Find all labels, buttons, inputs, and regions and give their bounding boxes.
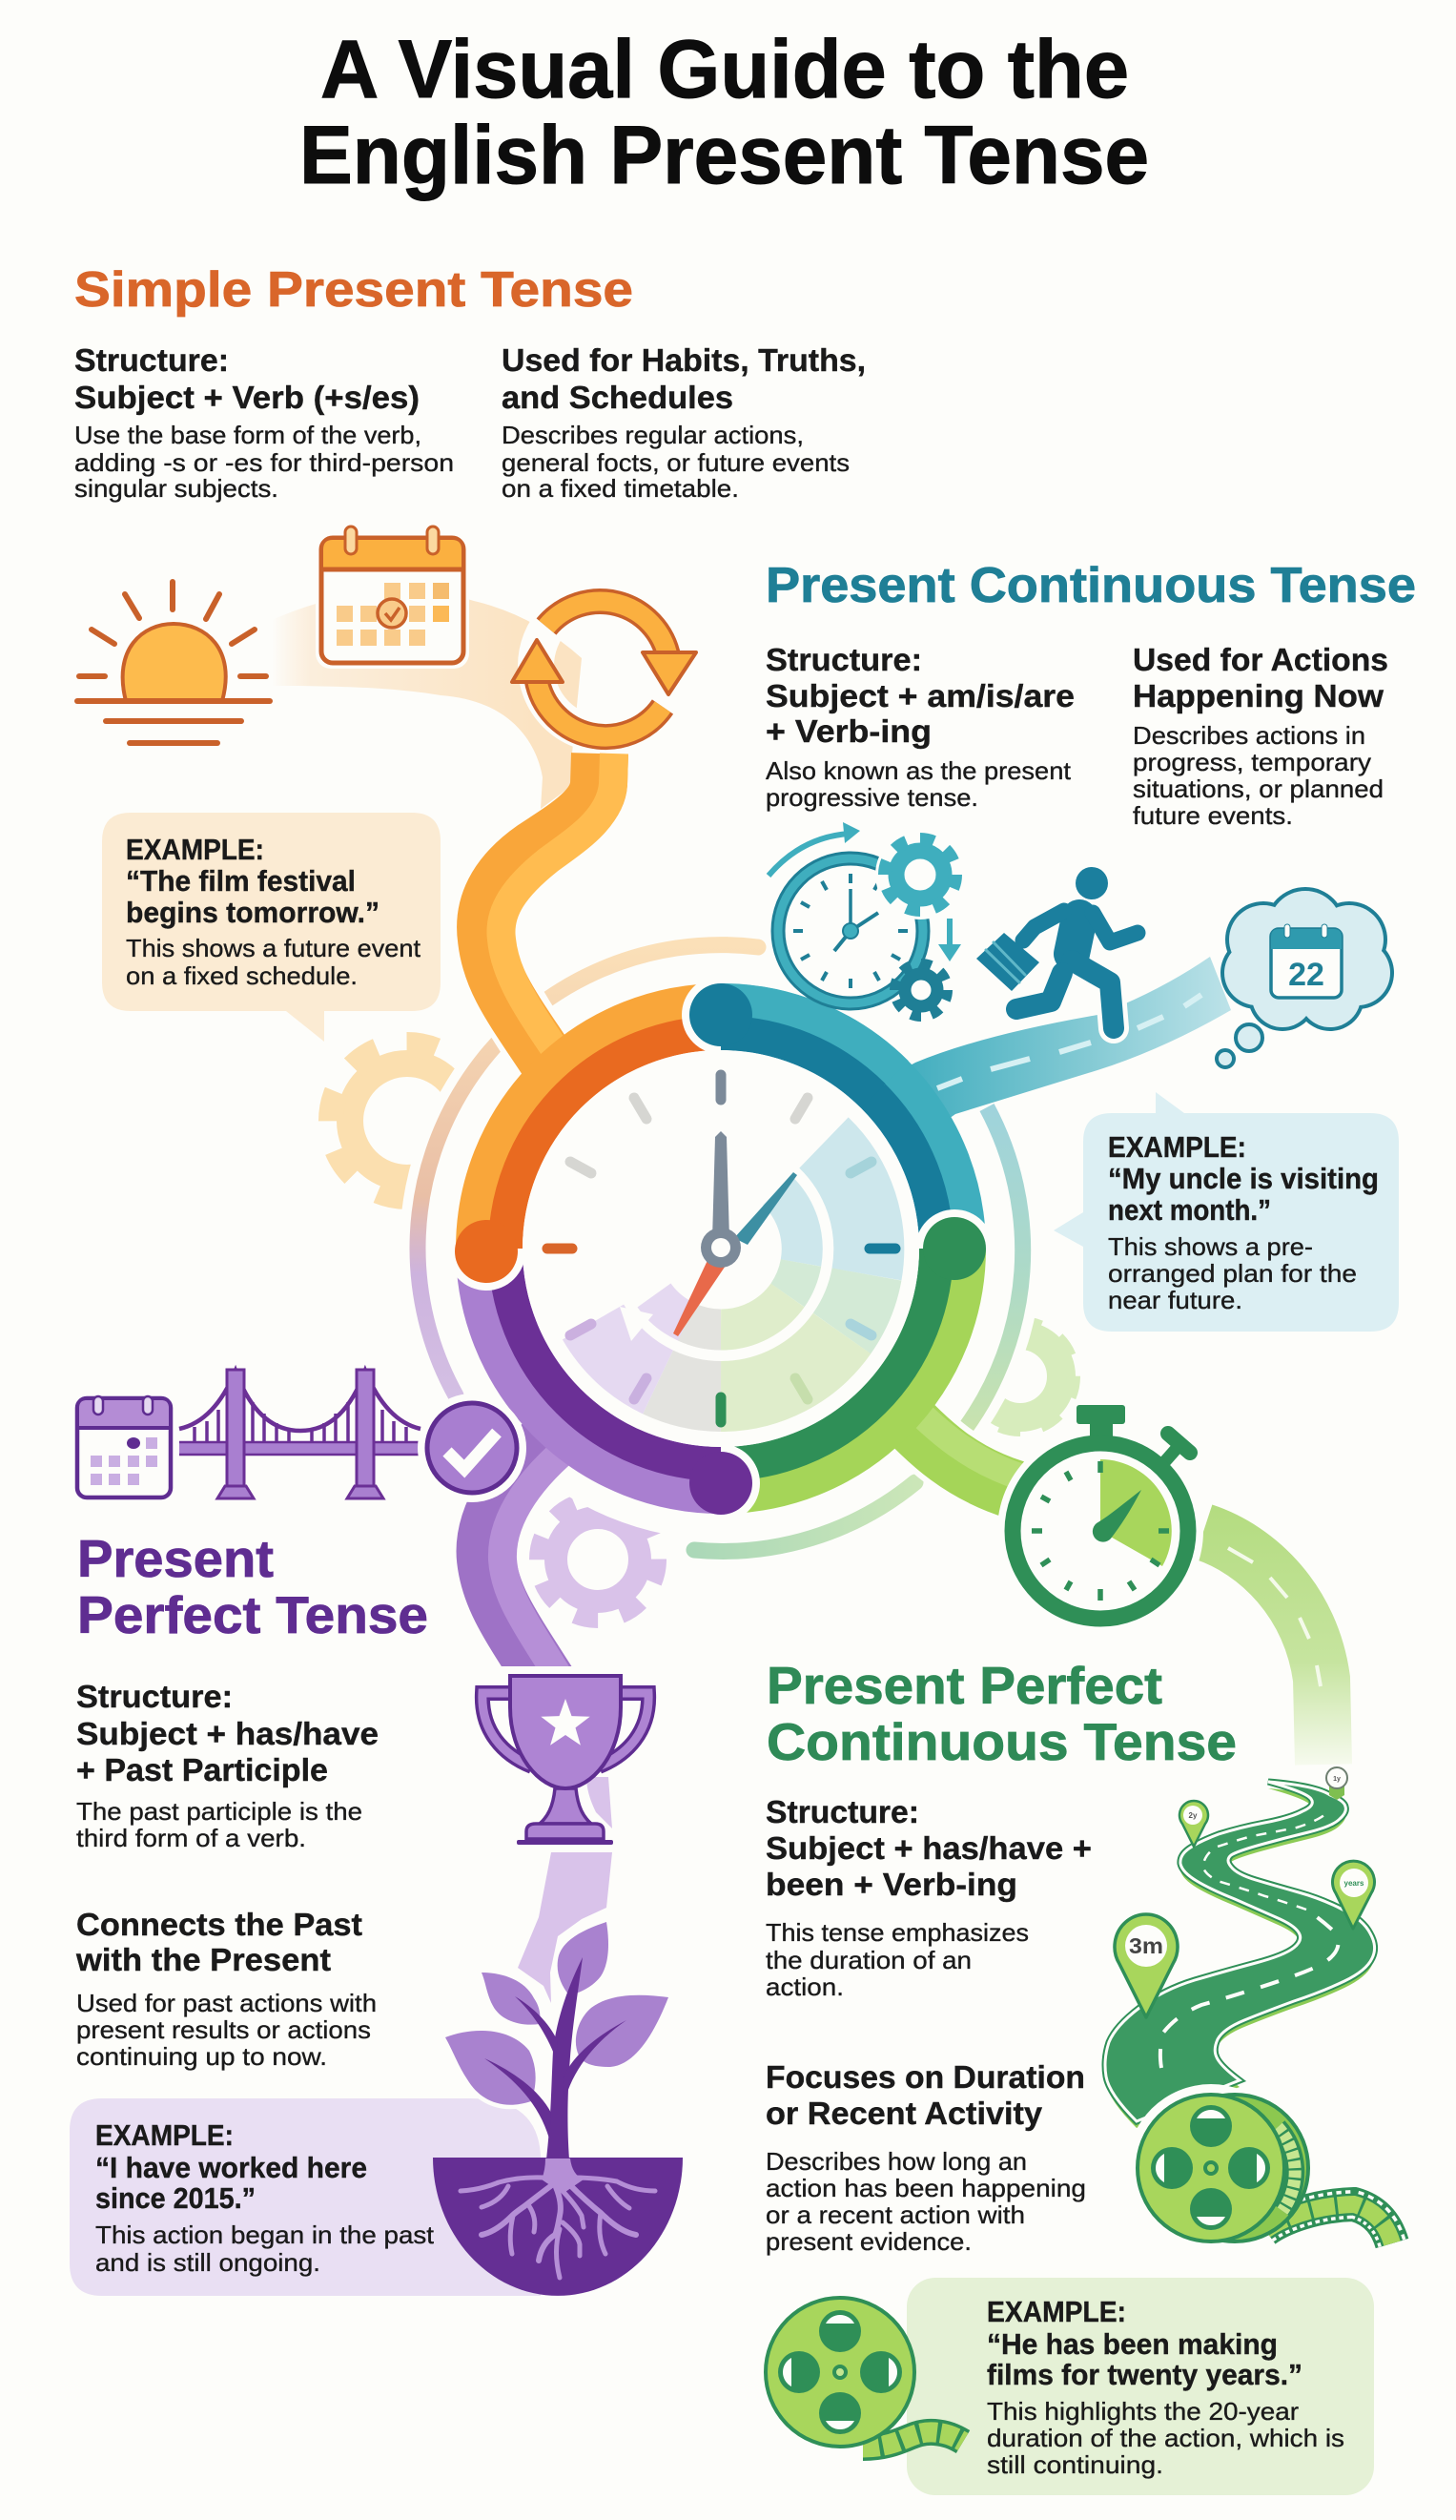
background gear: orange — [331, 1044, 483, 1197]
icon: film reel small — [766, 2298, 963, 2448]
clock ring: green segment — [721, 1209, 994, 1497]
green road — [1203, 1532, 1323, 1765]
usage block: Used for Actions — [1133, 642, 1388, 677]
usage block: Happening Now — [1133, 678, 1384, 713]
pin: far: 1y — [1333, 1776, 1341, 1783]
usage block: action has been happening — [766, 2174, 1086, 2202]
icon: check badge — [418, 1394, 526, 1502]
structure block: been + Verb-ing — [766, 1867, 1017, 1902]
structure block: third form of a verb. — [76, 1824, 306, 1852]
structure block — [766, 1794, 1092, 2001]
clock halo — [400, 927, 1042, 1570]
clock ring: orange segment — [447, 1001, 721, 1291]
icon: map pins — [1115, 1767, 1375, 2017]
callout: green example: This highlights the 20-year — [987, 2397, 1299, 2426]
gear: large teal — [875, 830, 965, 919]
pin: far — [1326, 1767, 1347, 1800]
icon: circular arrows — [512, 597, 696, 737]
callout: green example: still continuing. — [987, 2450, 1163, 2479]
usage block: with the Present — [75, 1942, 331, 1977]
icon: thought cloud with calendar — [1217, 887, 1394, 1067]
clock arrow — [620, 1307, 653, 1341]
usage block — [766, 2059, 1086, 2256]
gear: small teal — [894, 963, 948, 1017]
panel: present continuous text — [766, 558, 1416, 830]
structure block: The past participle is the — [76, 1797, 362, 1826]
icon: sun — [77, 582, 270, 743]
pin: 2y — [1179, 1801, 1208, 1847]
structure block: action. — [766, 1973, 844, 2001]
callout: teal example: EXAMPLE: — [1108, 1130, 1246, 1164]
callout: green example: films for twenty years.” — [987, 2358, 1302, 2391]
structure block: the duration of an — [766, 1946, 972, 1974]
heading: present perfect: Perfect Tense — [77, 1585, 428, 1644]
usage block: Describes actions in — [1133, 721, 1365, 750]
star — [541, 1699, 590, 1745]
callout: purple example: “I have worked here — [95, 2151, 367, 2184]
usage block: Describes regular actions, — [502, 421, 804, 449]
teal road — [901, 957, 1231, 1126]
callout: purple example: EXAMPLE: — [95, 2118, 234, 2152]
title — [299, 24, 1149, 201]
clock face — [523, 1050, 919, 1447]
heading: present perfect continuous: Continuous Tense — [767, 1712, 1237, 1771]
callout: orange example: “The film festival — [126, 864, 356, 898]
structure block: Structure: — [766, 642, 922, 677]
callout: teal example: This shows a pre- — [1108, 1232, 1313, 1261]
structure block: Also known as the present — [766, 756, 1072, 785]
stem — [484, 1957, 626, 2159]
pale orange path — [272, 590, 582, 809]
icon: plant with roots — [433, 1922, 683, 2296]
callout: teal example: orranged plan for the — [1108, 1259, 1357, 1288]
orange road — [485, 754, 614, 1066]
callout: teal example — [1054, 1092, 1399, 1332]
background gear: green — [967, 1323, 1074, 1430]
callout: teal example: near future. — [1108, 1286, 1242, 1314]
clock ticks — [547, 1075, 895, 1422]
usage block: situations, or planned — [1133, 775, 1384, 803]
pale purple path — [518, 1852, 612, 2003]
usage block: Focuses on Duration — [766, 2059, 1085, 2095]
callout: teal example: “My uncle is visiting — [1108, 1162, 1379, 1195]
structure block — [76, 1679, 379, 1852]
icon: film reel large — [1127, 2084, 1392, 2252]
panel: present perfect text — [75, 1529, 428, 2071]
pin: 2y: 2y — [1189, 1811, 1198, 1820]
structure block: Subject + has/have + — [766, 1830, 1092, 1866]
icon: clock with gears — [769, 822, 965, 1017]
structure block: Subject + Verb (+s/es) — [74, 380, 420, 415]
usage block: or Recent Activity — [766, 2096, 1043, 2131]
roots — [461, 2159, 655, 2278]
structure block — [74, 342, 454, 503]
background gear: purple — [539, 1500, 657, 1619]
callout: orange example: begins tomorrow.” — [126, 896, 379, 929]
callout: green example: “He has been making — [987, 2327, 1278, 2361]
pin: 3m — [1115, 1914, 1178, 2017]
structure block: adding -s or -es for third-person — [74, 448, 454, 477]
structure block: Structure: — [76, 1679, 233, 1714]
callout: orange example: EXAMPLE: — [126, 833, 264, 866]
usage block: Used for past actions with — [76, 1989, 377, 2017]
structure block: + Verb-ing — [766, 713, 932, 749]
usage block: on a fixed timetable. — [502, 474, 739, 503]
structure block: Use the base form of the verb, — [74, 421, 421, 449]
title: A Visual Guide to the — [320, 24, 1129, 115]
heading: present perfect continuous: Present Perfect — [767, 1656, 1162, 1715]
callout: orange example: on a fixed schedule. — [126, 961, 358, 990]
icon: calendar purple — [77, 1396, 171, 1498]
callout: purple example — [70, 2098, 541, 2296]
structure block: Subject + has/have — [76, 1716, 379, 1751]
usage block: continuing up to now. — [76, 2042, 327, 2071]
structure block: + Past Participle — [76, 1752, 328, 1787]
green branch to stopwatch — [892, 1394, 1022, 1490]
structure block: progressive tense. — [766, 783, 978, 812]
heading: present perfect continuous — [767, 1656, 1237, 1771]
callout: green example — [907, 2278, 1374, 2495]
heading: present continuous: Present Continuous Tense — [766, 558, 1416, 613]
usage block — [502, 342, 866, 503]
panel: simple present text — [74, 262, 866, 503]
usage block: general focts, or future events — [502, 448, 850, 477]
pin: 3m: 3m — [1129, 1933, 1163, 1958]
structure block: This tense emphasizes — [766, 1918, 1029, 1947]
pin: years: years — [1344, 1879, 1364, 1888]
usage block: present results or actions — [76, 2015, 371, 2044]
purple branch — [486, 1426, 577, 1707]
structure block: singular subjects. — [74, 474, 278, 503]
callout: green example: duration of the action, which is — [987, 2424, 1344, 2452]
usage block: Connects the Past — [76, 1907, 362, 1942]
heading: simple present: Simple Present Tense — [74, 262, 633, 318]
structure block: Structure: — [74, 342, 229, 378]
ring halo — [430, 958, 1012, 1539]
icon: trophy — [482, 1676, 648, 1845]
clock ring: purple segment — [473, 1249, 760, 1522]
callout: purple example: since 2015.” — [95, 2181, 256, 2215]
structure block — [766, 642, 1075, 812]
heading: present perfect — [77, 1529, 428, 1644]
icon: thought cloud with calendar: 22 — [1288, 957, 1324, 993]
structure block: Subject + am/is/are — [766, 678, 1075, 713]
usage block: and Schedules — [502, 380, 733, 415]
usage block: Used for Habits, Truths, — [502, 342, 866, 378]
leaves — [445, 1922, 668, 2105]
structure block: Structure: — [766, 1794, 919, 1829]
icon: running person — [976, 867, 1138, 1028]
heading: present perfect: Present — [77, 1529, 274, 1588]
clock hands — [734, 1172, 797, 1245]
usage block: Describes how long an — [766, 2147, 1027, 2176]
usage block — [1133, 642, 1388, 830]
callout: orange example: This shows a future event — [126, 934, 421, 962]
pin: years — [1333, 1861, 1375, 1929]
clock ring: teal cap — [682, 976, 896, 1096]
panel: present perfect continuous text — [766, 1656, 1237, 2256]
usage block: present evidence. — [766, 2227, 972, 2256]
title: English Present Tense — [299, 110, 1149, 201]
icon: winding road — [1105, 1782, 1375, 2128]
outer thin rings — [418, 945, 1023, 1551]
callout: green example: EXAMPLE: — [987, 2295, 1126, 2328]
callout: purple example: and is still ongoing. — [95, 2248, 320, 2277]
usage block — [75, 1907, 377, 2071]
clock ring: teal segment — [683, 977, 969, 1249]
icon: calendar orange — [316, 527, 469, 669]
icon: bridge — [179, 1370, 420, 1498]
usage block: progress, temporary — [1133, 748, 1371, 776]
icon: stopwatch — [997, 1405, 1203, 1634]
callout: orange example — [102, 813, 441, 1042]
usage block: future events. — [1133, 801, 1293, 830]
usage block: or a recent action with — [766, 2200, 1025, 2229]
callout: teal example: next month.” — [1108, 1193, 1271, 1227]
callout: purple example: This action began in the past — [95, 2220, 435, 2249]
soil — [433, 2158, 683, 2296]
